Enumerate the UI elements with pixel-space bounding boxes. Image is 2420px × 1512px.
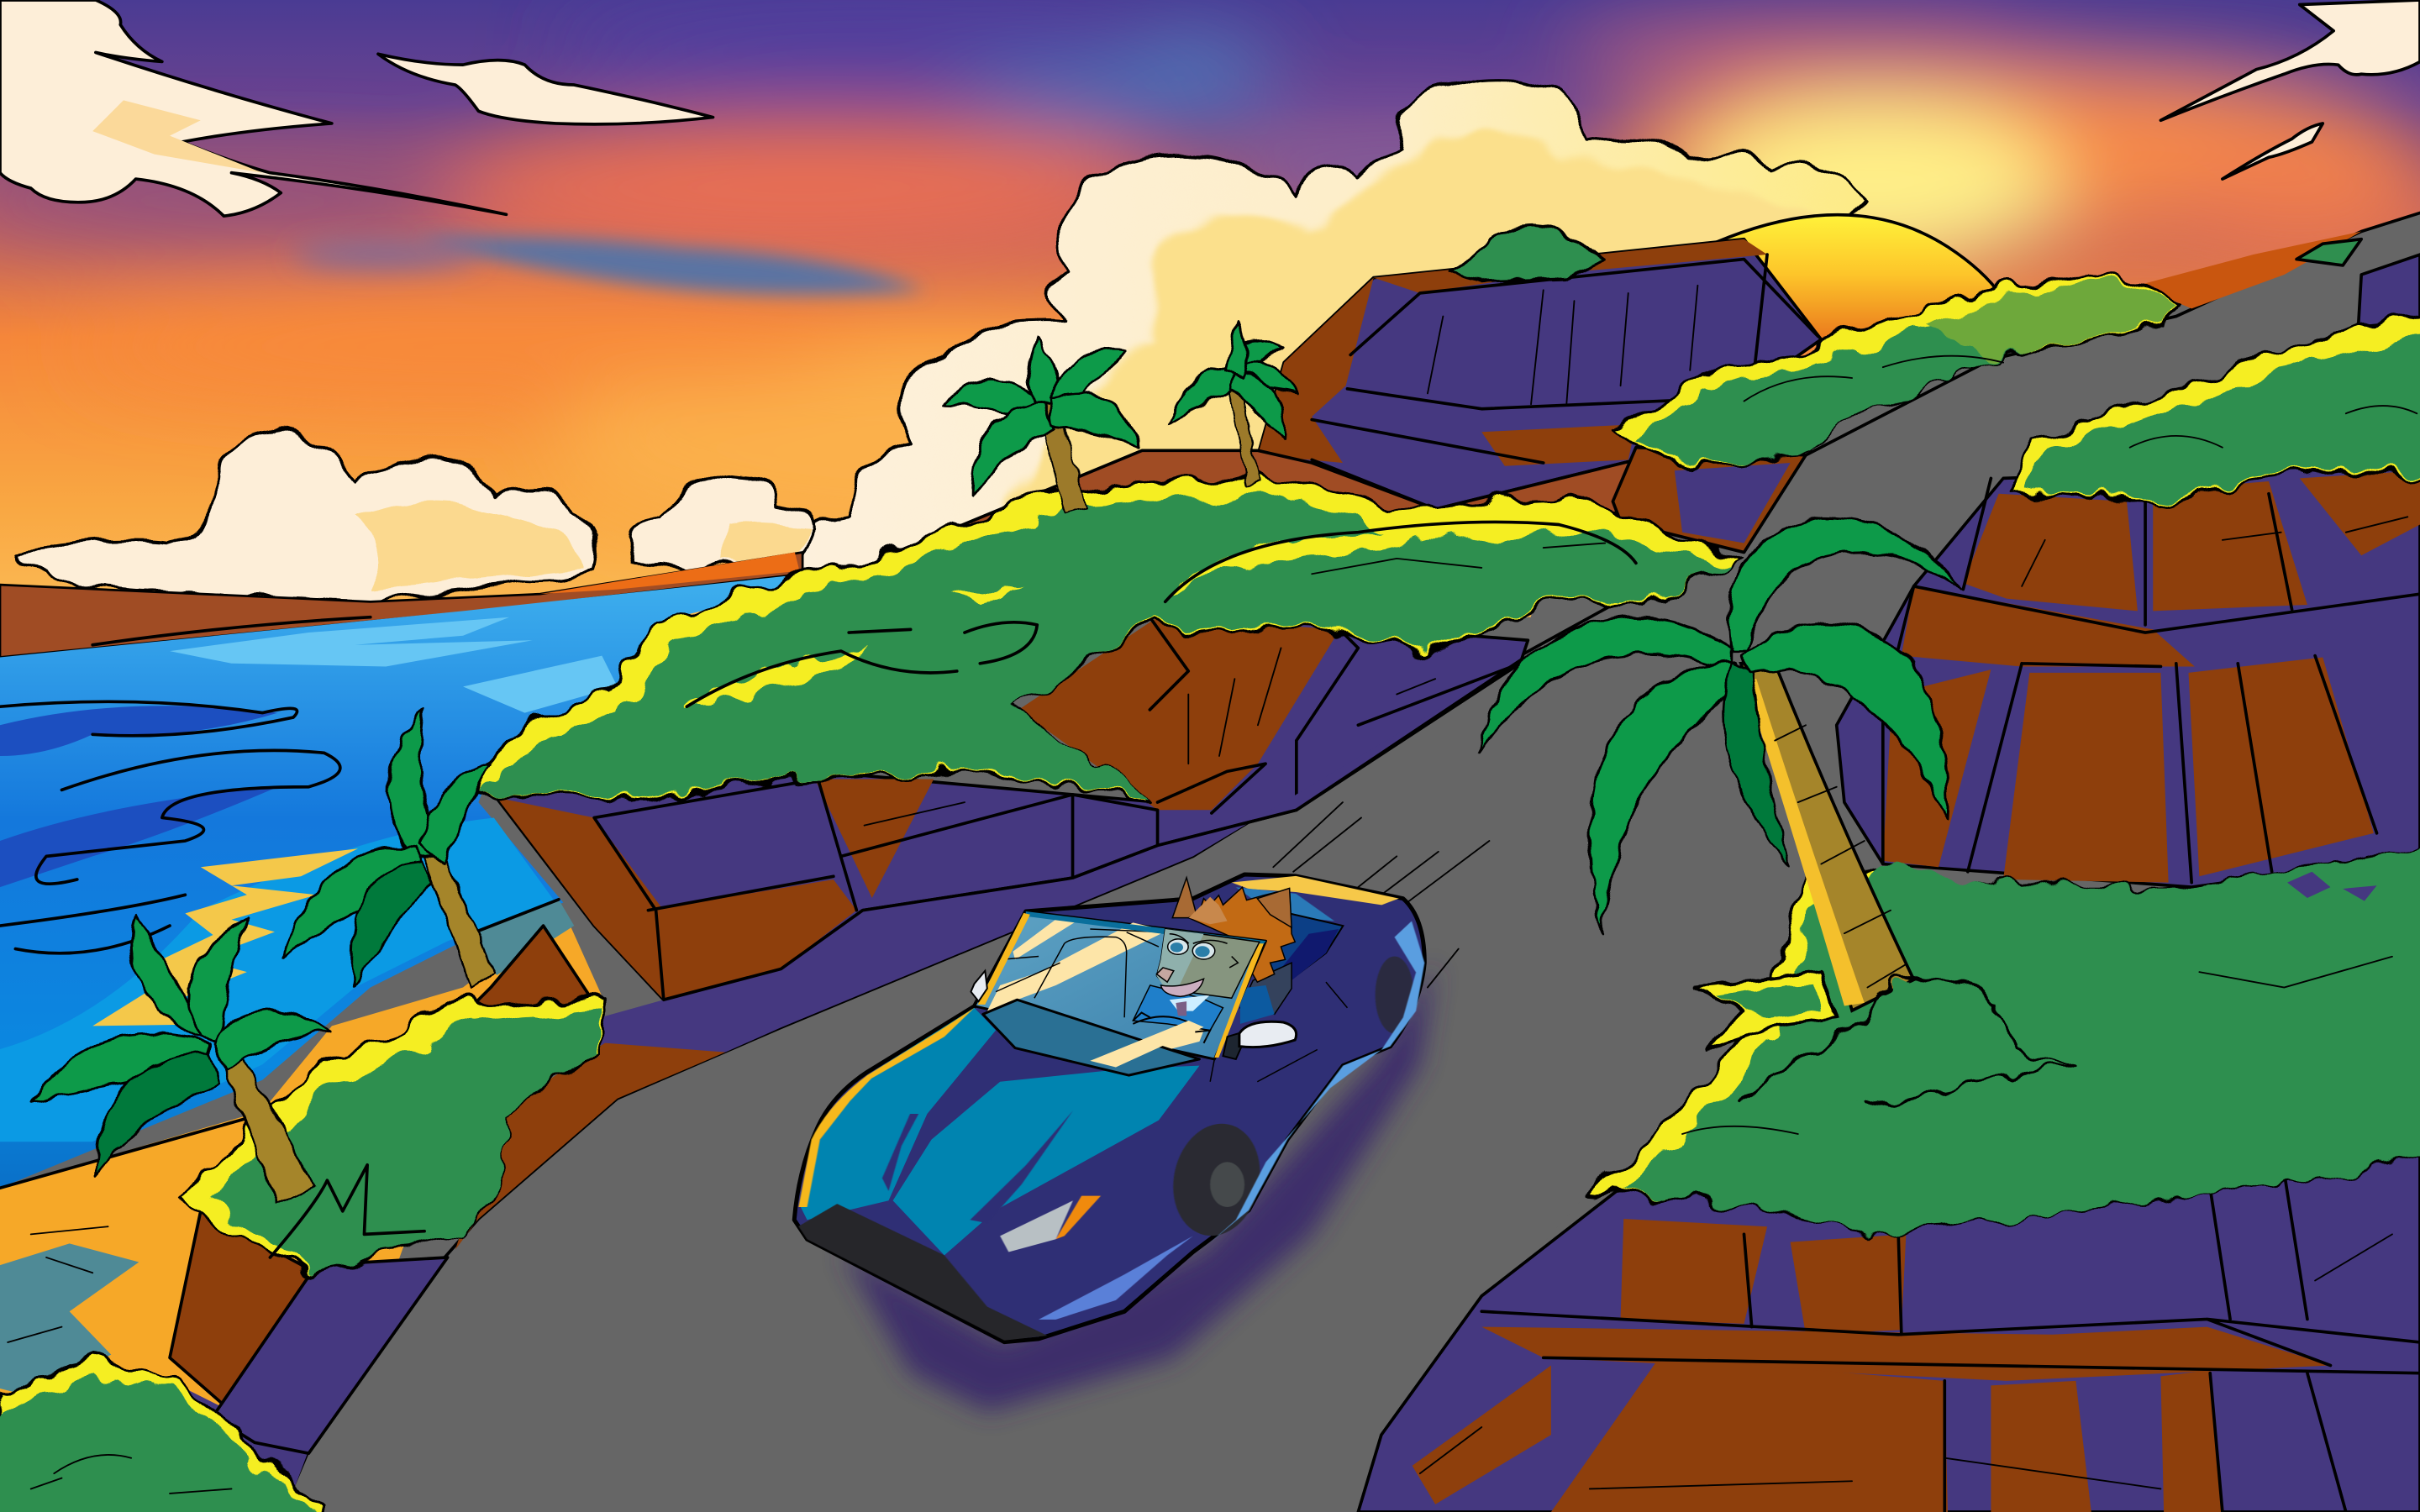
sun reflection on water [92, 848, 358, 1026]
body crease lines [1210, 982, 1347, 1082]
palm: far right of back hill [1168, 321, 1297, 486]
left brown outcrop [463, 926, 594, 1016]
cloud: top left [0, 0, 506, 216]
windshield [975, 911, 1266, 1066]
car shadow [841, 964, 1435, 1412]
left lower bush [182, 995, 605, 1273]
hood highlights [798, 1008, 1199, 1255]
main cliff face [494, 617, 1528, 1000]
dash highlight [1090, 1021, 1204, 1068]
right upper green top [2003, 301, 2420, 503]
top right corner rock [2359, 255, 2420, 327]
road [282, 213, 2420, 1512]
distant headland [0, 553, 802, 657]
big cumulus cloud [799, 76, 1863, 571]
driver: ears and fur [1172, 878, 1295, 982]
foreground small leaves [1695, 972, 1837, 1049]
car front grille [798, 1204, 1047, 1341]
far right land strip [2138, 232, 2361, 308]
front wheel [1166, 1121, 1267, 1239]
car body [794, 874, 1424, 1342]
bush in front of palm base [1744, 979, 2068, 1105]
road shadow band [587, 660, 1520, 1053]
back right green hill [1612, 275, 2187, 553]
brown land behind palms [926, 450, 1636, 540]
bush on back rock [1448, 225, 1605, 281]
road edge lines [282, 213, 2420, 1512]
lower left corner bush [0, 1357, 324, 1512]
cloud: top right [2160, 0, 2420, 120]
rear wheel [1376, 957, 1414, 1033]
side reflections [1039, 876, 1424, 1320]
palm: behind clifftop [944, 339, 1139, 512]
sky [0, 0, 2420, 648]
palm: large foreground [1479, 517, 1960, 1011]
lower ground base [0, 617, 2420, 1512]
car [794, 874, 1424, 1342]
beach [0, 900, 605, 1512]
right lawn [1590, 841, 2420, 1234]
right mid cliff [1837, 463, 2420, 887]
sun [1716, 215, 2002, 347]
ocean [0, 574, 806, 1188]
palm: on the beach lower [31, 913, 330, 1204]
headlight [1000, 1196, 1101, 1252]
rear deck [1240, 913, 1343, 1024]
cloud: small upper [378, 54, 713, 124]
palm: on the beach upper [281, 710, 494, 988]
mirror [971, 971, 1297, 1059]
bottom right cliff [1358, 1149, 2420, 1512]
left ground [455, 1043, 725, 1250]
main green clifftop [460, 478, 1741, 806]
driver: face and suit [1133, 929, 1260, 1031]
steering wheel [1133, 1012, 1210, 1043]
cloud: horizon small [625, 474, 818, 568]
left cliff [170, 1211, 448, 1512]
speed lines [1273, 802, 1489, 988]
back rock outcrop [1258, 239, 1821, 509]
cloud: thin wisp right [2223, 123, 2323, 179]
cloud: horizon left [18, 430, 595, 601]
cliff base line [664, 660, 1520, 1000]
dashboard [983, 1000, 1199, 1075]
